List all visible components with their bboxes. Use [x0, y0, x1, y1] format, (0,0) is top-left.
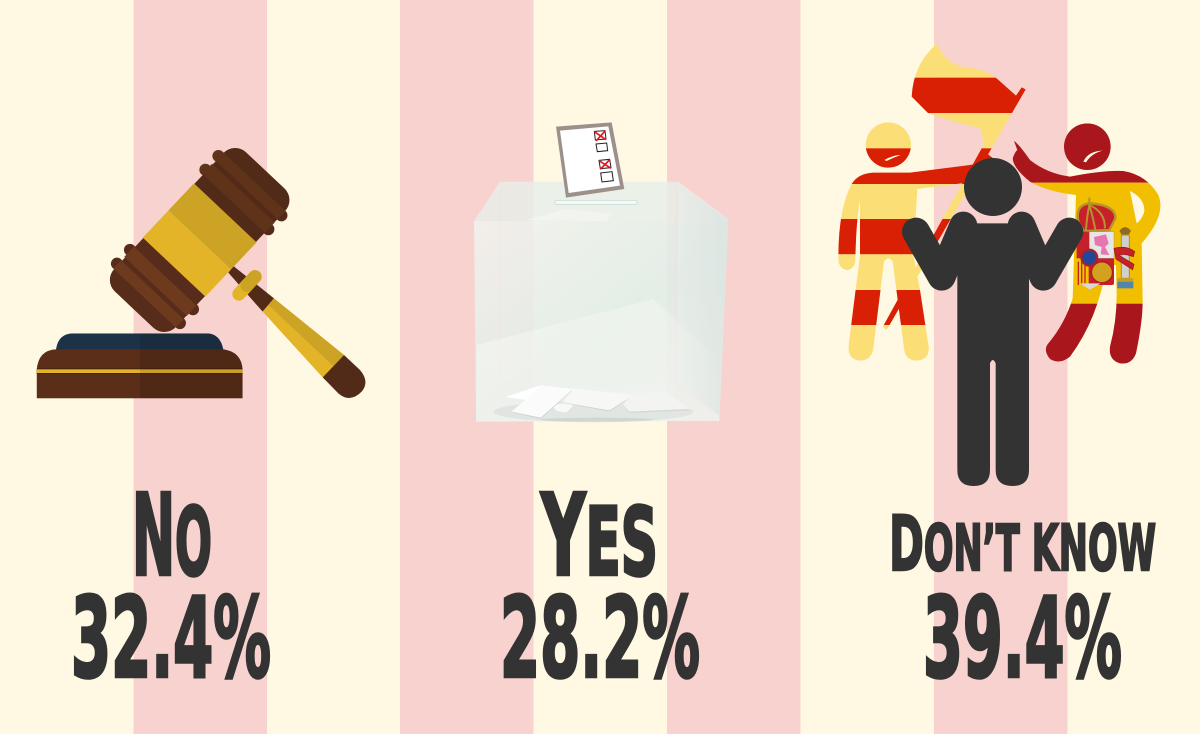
shrugging figure	[916, 158, 1069, 486]
slot	[555, 200, 637, 204]
label: No 32.4%	[71, 472, 271, 704]
value: 32.4%: 32.4%	[71, 574, 271, 704]
ballots in the box	[505, 385, 689, 419]
box reflection	[476, 299, 720, 422]
falling ballot paper	[556, 122, 624, 198]
value: 28.2%: 28.2%	[500, 574, 700, 704]
label: Yes 28.2%	[500, 472, 700, 704]
gavel handle	[228, 266, 365, 398]
icon: divided people with flags and shrugging figure	[830, 35, 1170, 486]
inner box edges	[476, 183, 719, 420]
Spanish coat of arms	[1076, 198, 1135, 290]
icon: transparent ballot box	[474, 122, 728, 422]
shadow under ballots	[493, 401, 693, 422]
heading: No: NO	[132, 472, 212, 602]
label: Don't know 39.4%	[889, 499, 1156, 704]
box back and top	[474, 182, 728, 221]
icon: gavel and sound block	[33, 136, 365, 400]
gavel head	[98, 136, 301, 343]
box front	[474, 221, 728, 422]
sound block	[33, 332, 247, 400]
figure with Catalan flag	[838, 44, 1026, 360]
box side panel	[677, 187, 728, 415]
heading: Yes: YES	[540, 472, 658, 602]
figure with Spanish flag	[1012, 123, 1160, 364]
